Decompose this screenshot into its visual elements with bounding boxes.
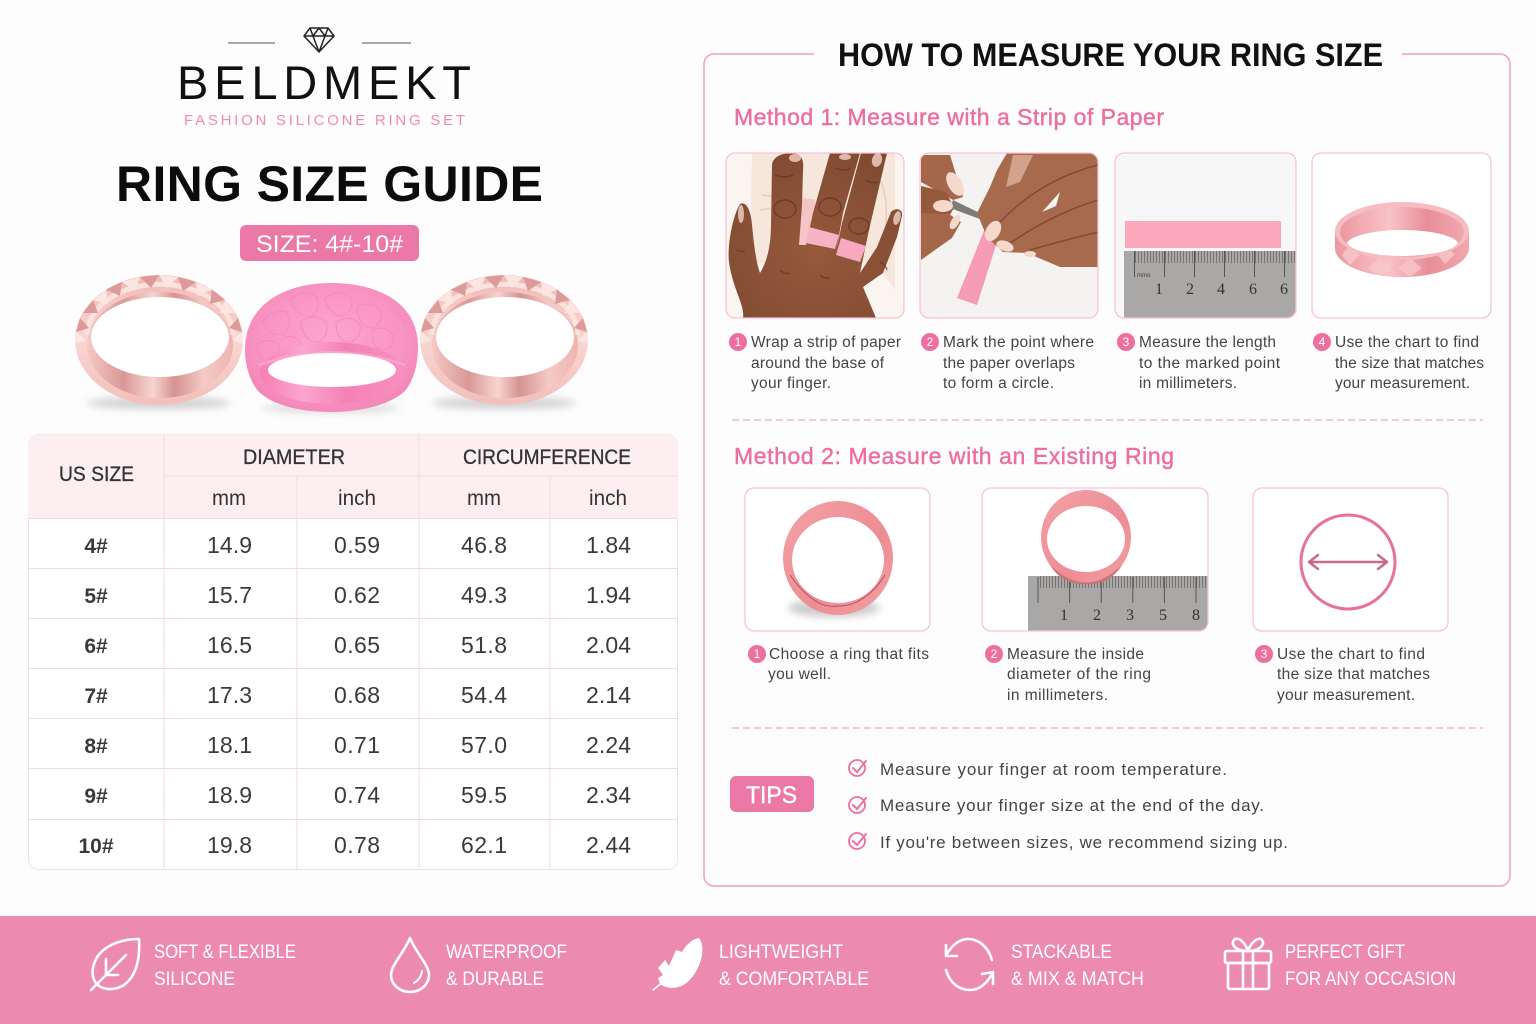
feature: waterproof: & DURABLE <box>446 969 544 990</box>
center pink textured ring <box>245 283 418 413</box>
photo: ring on ruler: 2 <box>1093 607 1101 624</box>
feature: perfect gift: PERFECT GIFT <box>1285 942 1405 963</box>
feature: soft and flexible: SILICONE <box>154 969 235 990</box>
captions: method 2 <box>748 645 1430 704</box>
row 6#: 16.5 <box>207 632 252 658</box>
left faceted ring <box>75 275 243 409</box>
step 2: 2 <box>927 335 934 349</box>
row 4#: 0.59 <box>334 532 380 558</box>
diagram: ring diameter <box>1253 488 1448 631</box>
step 2: Mark the point where <box>943 334 1094 351</box>
step 3: Use the chart to find <box>1277 646 1425 663</box>
step 3: your measurement. <box>1277 687 1415 704</box>
logo <box>177 28 471 129</box>
row 4# <box>84 532 631 558</box>
photo: existing ring <box>745 488 930 631</box>
size badge <box>240 225 419 261</box>
step 3: 3 <box>1261 647 1268 661</box>
step 3: to the marked point <box>1139 355 1281 372</box>
row 6#: 0.65 <box>334 632 380 658</box>
icon: diamond <box>304 28 334 52</box>
feature: soft and flexible: SOFT & FLEXIBLE <box>154 942 296 963</box>
photo: ruler and paper strip: 6 <box>1280 281 1288 298</box>
table header <box>59 446 631 510</box>
photo: ruler and paper strip: 2 <box>1186 281 1194 298</box>
feature: waterproof: WATERPROOF <box>446 942 567 963</box>
photo: ruler and paper strip <box>1115 153 1296 318</box>
step 3: the size that matches <box>1277 666 1430 683</box>
tip 2: Measure your finger size at the end of the day. <box>880 796 1264 815</box>
photo: faceted rose ring <box>1312 153 1491 318</box>
feature: lightweight: & COMFORTABLE <box>719 969 869 990</box>
row 5#: 49.3 <box>461 582 507 608</box>
row 8#: 2.24 <box>586 732 631 758</box>
row 4#: 46.8 <box>461 532 507 558</box>
feature: stackable: STACKABLE <box>1011 942 1112 963</box>
photo: ring on ruler: 5 <box>1159 607 1167 624</box>
photo: ruler and paper strip: mmo <box>1137 273 1151 279</box>
row 10#: 2.44 <box>586 832 631 858</box>
row 10#: 0.78 <box>334 832 380 858</box>
icon: gift box <box>1225 939 1271 989</box>
panel: how to measure <box>704 37 1510 886</box>
title: RING SIZE GUIDE <box>116 156 543 212</box>
row 7#: 2.14 <box>586 682 631 708</box>
icon: leaf <box>91 939 139 990</box>
size table <box>28 434 678 870</box>
feature: stackable: & MIX & MATCH <box>1011 969 1144 990</box>
step 4 <box>1313 333 1484 392</box>
table header: CIRCUMFERENCE <box>463 446 631 469</box>
photo: ruler and paper strip: 1 <box>1155 281 1163 298</box>
row 7# <box>84 682 631 708</box>
method 2 heading: Method 2: Measure with an Existing Ring <box>734 443 1174 469</box>
step 3 <box>1117 333 1281 392</box>
step 3: 3 <box>1123 335 1130 349</box>
tips badge: TIPS <box>746 782 797 809</box>
row 4#: 14.9 <box>207 532 252 558</box>
row 10#: 19.8 <box>207 832 252 858</box>
feature: waterproof <box>391 938 567 992</box>
photo: ring on ruler <box>982 488 1208 631</box>
step 1: Choose a ring that fits <box>769 646 929 663</box>
row 7#: 54.4 <box>461 682 507 708</box>
step 4: 4 <box>1319 335 1326 349</box>
photo: ring on ruler: 8 <box>1192 607 1200 624</box>
table header: DIAMETER <box>243 446 345 469</box>
step 3 <box>1255 645 1430 704</box>
row 5# <box>84 582 631 608</box>
row 10#: 62.1 <box>461 832 507 858</box>
row 9#: 59.5 <box>461 782 507 808</box>
step 4: the size that matches <box>1335 355 1484 372</box>
row 5#: 0.62 <box>334 582 380 608</box>
row 8#: 0.71 <box>334 732 380 758</box>
step 2: in millimeters. <box>1007 687 1108 704</box>
row 4#: 4# <box>84 535 108 558</box>
feature: lightweight <box>653 938 869 990</box>
photo: marking the paper <box>920 153 1098 318</box>
row 7#: 17.3 <box>207 682 252 708</box>
brand name: BELDMEKT <box>177 56 471 109</box>
step 2: the paper overlaps <box>943 355 1075 372</box>
step 3: in millimeters. <box>1139 375 1237 392</box>
icon: swap arrows <box>946 939 993 990</box>
row 10#: 10# <box>78 835 114 858</box>
icon: water drop <box>391 938 429 992</box>
step 2 <box>921 333 1094 392</box>
footer banner <box>0 916 1536 1024</box>
row 6#: 2.04 <box>586 632 631 658</box>
table header: US SIZE <box>59 463 134 486</box>
row 9#: 2.34 <box>586 782 631 808</box>
table header: mm <box>212 487 246 510</box>
step 1 <box>729 333 901 392</box>
step 1: 1 <box>754 647 761 661</box>
tips badge <box>730 776 814 812</box>
step 2 <box>985 645 1151 704</box>
step 2: 2 <box>991 647 998 661</box>
row 7#: 7# <box>84 685 108 708</box>
tagline: FASHION SILICONE RING SET <box>184 112 465 129</box>
row 5#: 15.7 <box>207 582 252 608</box>
step 1: Wrap a strip of paper <box>751 334 901 351</box>
row 6# <box>84 632 631 658</box>
step 2: Measure the inside <box>1007 646 1144 663</box>
step 1 <box>748 645 929 683</box>
feature: perfect gift: FOR ANY OCCASION <box>1285 969 1456 990</box>
row 7#: 0.68 <box>334 682 380 708</box>
table header: mm <box>467 487 501 510</box>
photo: ruler and paper strip: 6 <box>1249 281 1257 298</box>
step 1: 1 <box>735 335 742 349</box>
row 6#: 6# <box>84 635 108 658</box>
row 9#: 18.9 <box>207 782 252 808</box>
panel heading: HOW TO MEASURE YOUR RING SIZE <box>838 37 1383 73</box>
photo: ring on ruler: 1 <box>1060 607 1068 624</box>
step 4: your measurement. <box>1335 375 1470 392</box>
tip 3: If you're between sizes, we recommend sizing up. <box>880 833 1288 852</box>
feature: lightweight: LIGHTWEIGHT <box>719 942 843 963</box>
row 8#: 18.1 <box>207 732 252 758</box>
step 2: to form a circle. <box>943 375 1054 392</box>
row 8# <box>84 732 631 758</box>
step 2: diameter of the ring <box>1007 666 1151 683</box>
icon: feather <box>653 938 702 990</box>
photo: ruler and paper strip: 4 <box>1217 281 1225 298</box>
size badge: SIZE: 4#-10# <box>256 231 404 258</box>
row 5#: 5# <box>84 585 108 608</box>
row 8#: 57.0 <box>461 732 507 758</box>
table header: inch <box>589 487 627 510</box>
photo: paper around fingers <box>726 152 904 318</box>
method 1 heading: Method 1: Measure with a Strip of Paper <box>734 104 1164 130</box>
tips list <box>849 760 1288 852</box>
row 9# <box>84 782 631 808</box>
feature: perfect gift <box>1225 939 1456 990</box>
tip 1: Measure your finger at room temperature. <box>880 760 1227 779</box>
step 1: around the base of <box>751 355 885 372</box>
feature: stackable <box>946 939 1144 990</box>
right faceted ring <box>420 275 588 409</box>
row 6#: 51.8 <box>461 632 507 658</box>
row 9#: 0.74 <box>334 782 380 808</box>
step 1: your finger. <box>751 375 831 392</box>
row 8#: 8# <box>84 735 108 758</box>
row 5#: 1.94 <box>586 582 631 608</box>
row 4#: 1.84 <box>586 532 631 558</box>
step 1: you well. <box>768 666 831 683</box>
photo: ring on ruler: 3 <box>1126 607 1134 624</box>
row 10# <box>78 832 631 858</box>
step 4: Use the chart to find <box>1335 334 1479 351</box>
feature: soft and flexible <box>91 939 296 990</box>
step 3: Measure the length <box>1139 334 1276 351</box>
captions: method 1 <box>729 333 1484 392</box>
table header: inch <box>338 487 376 510</box>
row 9#: 9# <box>84 785 108 808</box>
rings illustration <box>75 275 588 413</box>
